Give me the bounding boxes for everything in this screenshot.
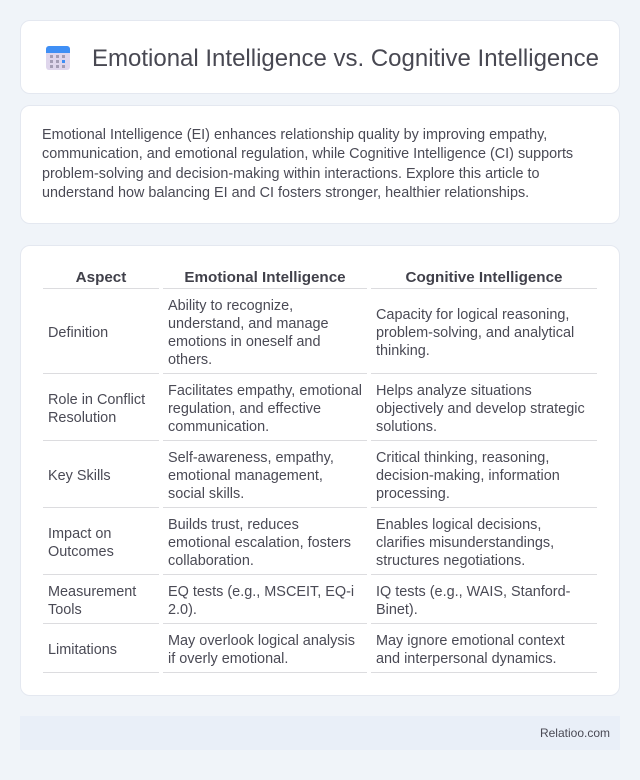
comparison table: understand, and manage [168,316,329,332]
comparison table: objectively and develop strategic [376,401,585,417]
comparison table: structures negotiations. [376,553,525,569]
comparison table: processing. [376,486,450,502]
comparison table: Outcomes [48,544,114,560]
comparison table: Cognitive Intelligence [406,269,562,286]
comparison table: Helps analyze situations [376,383,532,399]
footer [20,716,620,750]
comparison table: Emotional Intelligence [184,269,346,286]
comparison table: May ignore emotional context [376,633,565,649]
comparison table: 2.0). [168,602,197,618]
comparison table: emotional escalation, fosters [168,535,351,551]
comparison table: regulation, and effective [168,401,321,417]
comparison table: if overly emotional. [168,651,288,667]
icon: calendar [46,46,70,70]
intro text: understand how balancing EI and CI fosters stronger, healthier relationships. [42,185,529,201]
comparison table: thinking. [376,343,430,359]
comparison table: May overlook logical analysis [168,633,355,649]
comparison table: and interpersonal dynamics. [376,651,557,667]
header card [20,20,620,94]
comparison table: Role in Conflict [48,392,145,408]
comparison table: Resolution [48,410,116,426]
comparison table: Facilitates empathy, emotional [168,383,362,399]
intro card [20,105,620,224]
comparison table: Binet). [376,602,418,618]
comparison table: clarifies misunderstandings, [376,535,554,551]
comparison table: collaboration. [168,553,254,569]
intro text: communication, and emotional regulation, while Cognitive Intelligence (CI) supports [42,146,573,162]
comparison table: communication. [168,419,269,435]
comparison table: Ability to recognize, [168,298,293,314]
comparison table: Definition [48,325,108,341]
intro text: Emotional Intelligence (EI) enhances relationship quality by improving empathy, [42,127,547,143]
comparison table: Self-awareness, empathy, [168,450,334,466]
comparison table: Impact on [48,526,111,542]
intro text [42,127,573,201]
comparison table: Aspect [76,269,126,286]
comparison table: decision-making, information [376,468,560,484]
comparison table: Tools [48,602,82,618]
table card [20,245,620,696]
comparison table: Builds trust, reduces [168,517,299,533]
comparison table: Key Skills [48,468,111,484]
comparison table: Enables logical decisions, [376,517,541,533]
comparison table: emotional management, [168,468,323,484]
comparison table: emotions in oneself and [168,334,320,350]
comparison table: solutions. [376,419,437,435]
comparison table: IQ tests (e.g., WAIS, Stanford- [376,584,570,600]
title: Emotional Intelligence vs. Cognitive Intelligence [92,45,599,72]
footer credit: Relatioo.com [540,726,610,740]
comparison table: Critical thinking, reasoning, [376,450,549,466]
intro text: problem-solving and decision-making within interactions. Explore this article to [42,166,540,182]
comparison table: EQ tests (e.g., MSCEIT, EQ-i [168,584,354,600]
comparison table: Measurement [48,584,136,600]
comparison table [43,269,597,673]
comparison table: problem-solving, and analytical [376,325,574,341]
comparison table: Limitations [48,642,117,658]
comparison table: social skills. [168,486,244,502]
comparison table: Capacity for logical reasoning, [376,307,569,323]
comparison table: others. [168,352,212,368]
